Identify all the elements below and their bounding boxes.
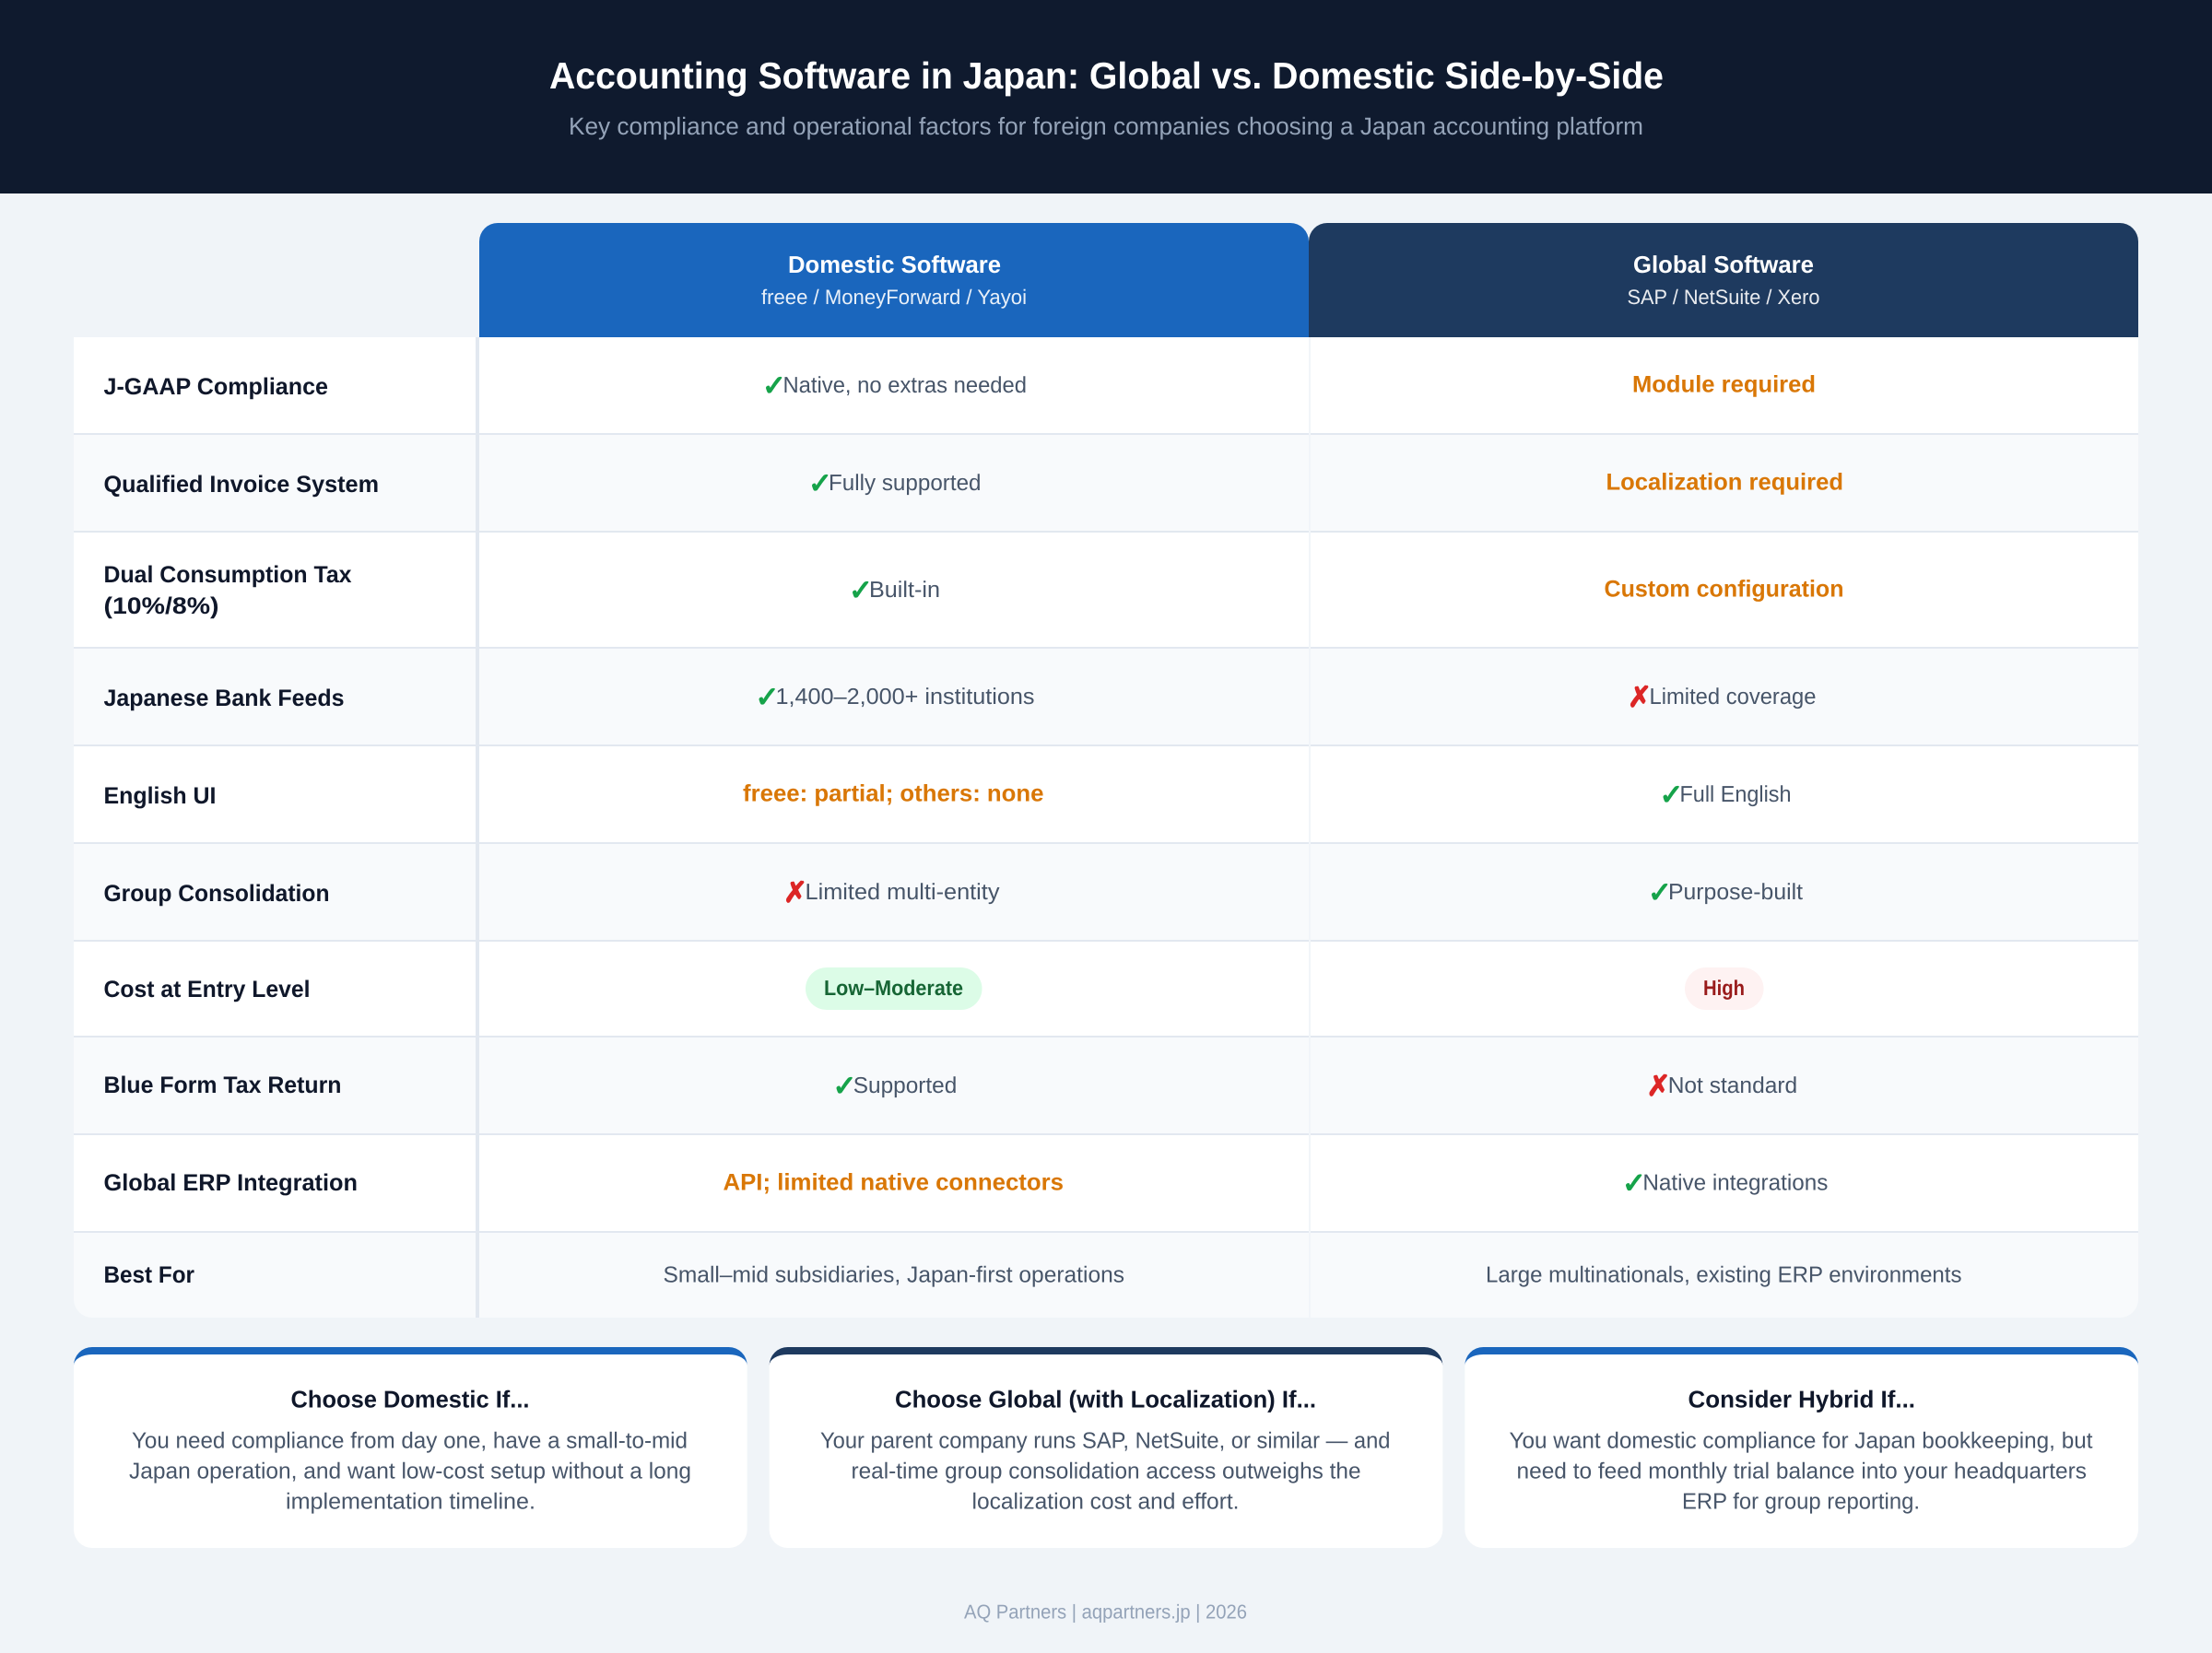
global value: Limited coverage bbox=[1650, 685, 1816, 709]
domestic value bbox=[783, 876, 1000, 909]
row: Best For: Best For bbox=[103, 1262, 194, 1288]
domestic value: Native, no extras needed bbox=[783, 373, 1027, 398]
badge: High bbox=[1685, 967, 1764, 1010]
domestic value: Small–mid subsidiaries, Japan-first operations bbox=[664, 1262, 1124, 1288]
global value bbox=[1660, 779, 1792, 812]
domestic value: API; limited native connectors bbox=[723, 1170, 1064, 1196]
global value: ✗ bbox=[1647, 1070, 1670, 1103]
row: Group Consolidation: Group Consolidation bbox=[103, 881, 330, 907]
row: Dual Consumption Tax bbox=[74, 533, 2138, 649]
row: Dual Consumption Tax: (10%/8%) bbox=[103, 593, 219, 619]
card body: Your parent company runs SAP, NetSuite, or similar — and bbox=[820, 1428, 1390, 1454]
row: Dual Consumption Tax: Dual Consumption Tax bbox=[103, 562, 352, 588]
card: Choose Domestic bbox=[74, 1347, 747, 1548]
row: Global ERP Integration bbox=[74, 1135, 2138, 1233]
domestic value bbox=[762, 369, 1027, 403]
domestic value: 1,400–2,000+ institutions bbox=[776, 685, 1034, 709]
card body: localization cost and effort. bbox=[971, 1489, 1239, 1515]
domestic value: ✓ bbox=[808, 467, 832, 500]
domestic value: ✗ bbox=[783, 876, 807, 909]
card body bbox=[1510, 1428, 2093, 1515]
badge: Low–Moderate: Low–Moderate bbox=[824, 976, 963, 1000]
domestic value: ✓ bbox=[756, 681, 780, 714]
global value: Localization required bbox=[1606, 470, 1843, 496]
global value: ✗ bbox=[1628, 681, 1652, 714]
row: Cost at Entry Level: Cost at Entry Level bbox=[103, 977, 310, 1002]
row: English UI: English UI bbox=[103, 783, 216, 809]
row: Qualified Invoice System: Qualified Invoice System bbox=[103, 472, 379, 498]
global value: Full English bbox=[1679, 782, 1792, 807]
row: Japanese Bank Feeds bbox=[74, 649, 2138, 746]
comparison table bbox=[74, 337, 2138, 1318]
row: Japanese Bank Feeds: Japanese Bank Feeds bbox=[103, 686, 345, 711]
global value: Module required bbox=[1632, 372, 1816, 398]
card body: Japan operation, and want low-cost setup without a long bbox=[129, 1460, 691, 1483]
column header: Domestic Software: Domestic Software bbox=[788, 251, 1001, 278]
badge: High: High bbox=[1703, 976, 1745, 1000]
domestic value: freee: partial; others: none bbox=[743, 781, 1043, 807]
global value bbox=[1648, 876, 1803, 909]
card heading: Consider Hybrid If... bbox=[1688, 1386, 1915, 1413]
domestic value: Limited multi-entity bbox=[806, 880, 1000, 905]
header banner bbox=[0, 0, 2212, 193]
global value bbox=[1622, 1166, 1828, 1200]
column header: Global Software bbox=[1309, 223, 2138, 337]
row: Blue Form Tax Return: Blue Form Tax Return bbox=[103, 1073, 341, 1098]
card: Consider Hybrid bbox=[1465, 1347, 2138, 1548]
row: Cost at Entry Level bbox=[74, 942, 2138, 1038]
global value: Not standard bbox=[1668, 1073, 1797, 1098]
column header: Domestic Software bbox=[479, 223, 1309, 337]
card: Choose Global bbox=[770, 1347, 1442, 1548]
domestic value: Supported bbox=[853, 1073, 957, 1098]
footer: AQ Partners | aqpartners.jp | 2026 bbox=[964, 1601, 1247, 1624]
column header: Domestic Software: freee / MoneyForward / Yayoi bbox=[761, 286, 1027, 309]
global value: ✓ bbox=[1648, 876, 1672, 909]
global value: ✓ bbox=[1622, 1166, 1646, 1200]
row: Global ERP Integration: Global ERP Integration bbox=[103, 1170, 358, 1196]
card body: You want domestic compliance for Japan bookkeeping, but bbox=[1510, 1428, 2093, 1454]
card body bbox=[820, 1428, 1390, 1515]
card body bbox=[129, 1428, 691, 1515]
domestic value: Built-in bbox=[869, 578, 940, 603]
card heading: Choose Domestic If... bbox=[291, 1386, 529, 1413]
row: J-GAAP Compliance: J-GAAP Compliance bbox=[103, 374, 328, 400]
card body: You need compliance from day one, have a small-to-mid bbox=[132, 1428, 688, 1454]
domestic value: ✓ bbox=[762, 369, 786, 403]
global value: ✓ bbox=[1660, 779, 1683, 812]
domestic value bbox=[849, 574, 940, 607]
global value: Native integrations bbox=[1642, 1170, 1828, 1196]
card body: need to feed monthly trial balance into your headquarters bbox=[1517, 1460, 2087, 1483]
domestic value: Fully supported bbox=[829, 471, 981, 496]
domestic value: ✓ bbox=[833, 1070, 857, 1103]
global value bbox=[1647, 1070, 1797, 1103]
row: Blue Form Tax Return bbox=[74, 1038, 2138, 1135]
row: J-GAAP Compliance bbox=[74, 337, 2138, 435]
global value: Custom configuration bbox=[1604, 577, 1843, 603]
global value: Purpose-built bbox=[1668, 880, 1803, 905]
subtitle: Key compliance and operational factors for foreign companies choosing a Japan accounting platform bbox=[569, 112, 1643, 140]
row: Group Consolidation bbox=[74, 844, 2138, 942]
global value bbox=[1628, 681, 1816, 714]
card body: ERP for group reporting. bbox=[1682, 1489, 1920, 1515]
card body: implementation timeline. bbox=[286, 1489, 535, 1515]
column header: Global Software: Global Software bbox=[1633, 251, 1814, 278]
global value: Large multinationals, existing ERP environments bbox=[1486, 1262, 1961, 1288]
domestic value bbox=[833, 1070, 957, 1103]
card body: real-time group consolidation access outweighs the bbox=[852, 1460, 1360, 1483]
domestic value bbox=[756, 681, 1034, 714]
title: Accounting Software in Japan: Global vs. Domestic Side-by-Side bbox=[549, 54, 1664, 97]
badge: Low–Moderate bbox=[806, 967, 982, 1010]
row: Best For bbox=[74, 1233, 2138, 1318]
column header: Global Software: SAP / NetSuite / Xero bbox=[1628, 286, 1819, 309]
row: Qualified Invoice System bbox=[74, 435, 2138, 533]
row: English UI bbox=[74, 746, 2138, 844]
card heading: Choose Global (with Localization) If... bbox=[895, 1386, 1316, 1413]
domestic value: ✓ bbox=[849, 574, 873, 607]
domestic value bbox=[808, 467, 981, 500]
